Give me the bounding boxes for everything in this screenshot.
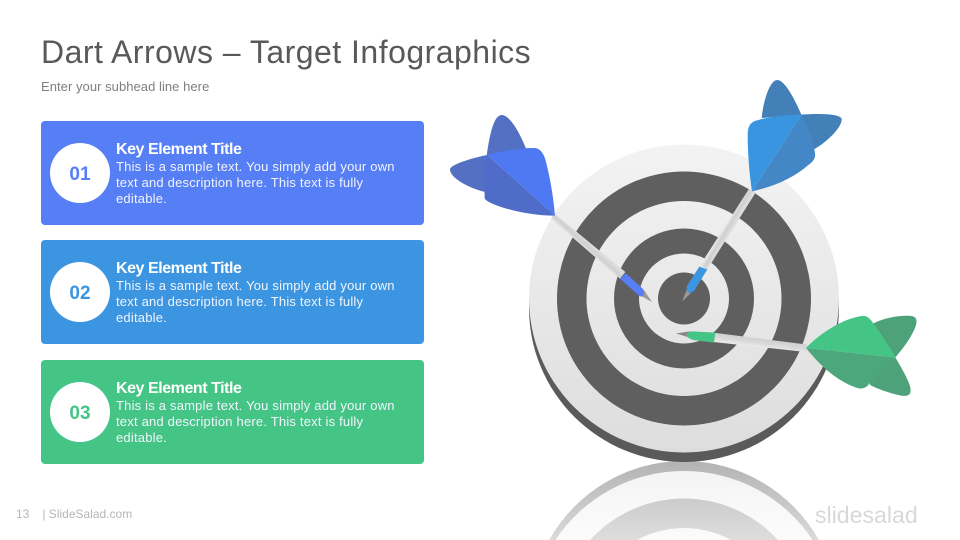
panel text 03: text and description here. This text is fully <box>116 414 363 429</box>
panel text 01: This is a sample text. You simply add your own <box>116 159 395 174</box>
panel text 03: editable. <box>116 430 167 445</box>
number badge 01: 01 <box>69 164 91 185</box>
number badge 03 <box>50 382 110 442</box>
target board <box>529 144 839 462</box>
panel text 01: text and description here. This text is fully <box>116 175 363 190</box>
panel: key element 01 <box>41 121 424 225</box>
panel text 01: editable. <box>116 191 167 206</box>
number badge 02: 02 <box>69 283 91 304</box>
logo: slidesalad: slidesalad <box>815 502 918 528</box>
panel title 02: Key Element Title <box>116 260 241 277</box>
panel text 03 <box>116 398 395 445</box>
dart: blue, upper right <box>682 80 842 301</box>
number badge 01 <box>50 143 110 203</box>
panel text 02: editable. <box>116 310 167 325</box>
panel text 01 <box>116 159 395 206</box>
number badge 03: 03 <box>69 403 91 424</box>
panel: key element 02 <box>41 240 424 344</box>
panel text 02: text and description here. This text is fully <box>116 294 363 309</box>
panel: key element 03 <box>41 360 424 464</box>
panel text 03: This is a sample text. You simply add your own <box>116 398 395 413</box>
subhead: Enter your subhead line here <box>41 79 209 94</box>
panel text 02: This is a sample text. You simply add your own <box>116 278 395 293</box>
target reflection <box>540 461 830 540</box>
panel text 02 <box>116 278 395 325</box>
footer: page number and site: 13 | SlideSalad.com <box>16 507 132 521</box>
title: Dart Arrows – Target Infographics <box>41 34 531 70</box>
dart: indigo, upper left <box>450 115 652 302</box>
panel title 01: Key Element Title <box>116 141 241 158</box>
panel title 03: Key Element Title <box>116 380 241 397</box>
number badge 02 <box>50 262 110 322</box>
dart: green, right <box>676 316 917 396</box>
